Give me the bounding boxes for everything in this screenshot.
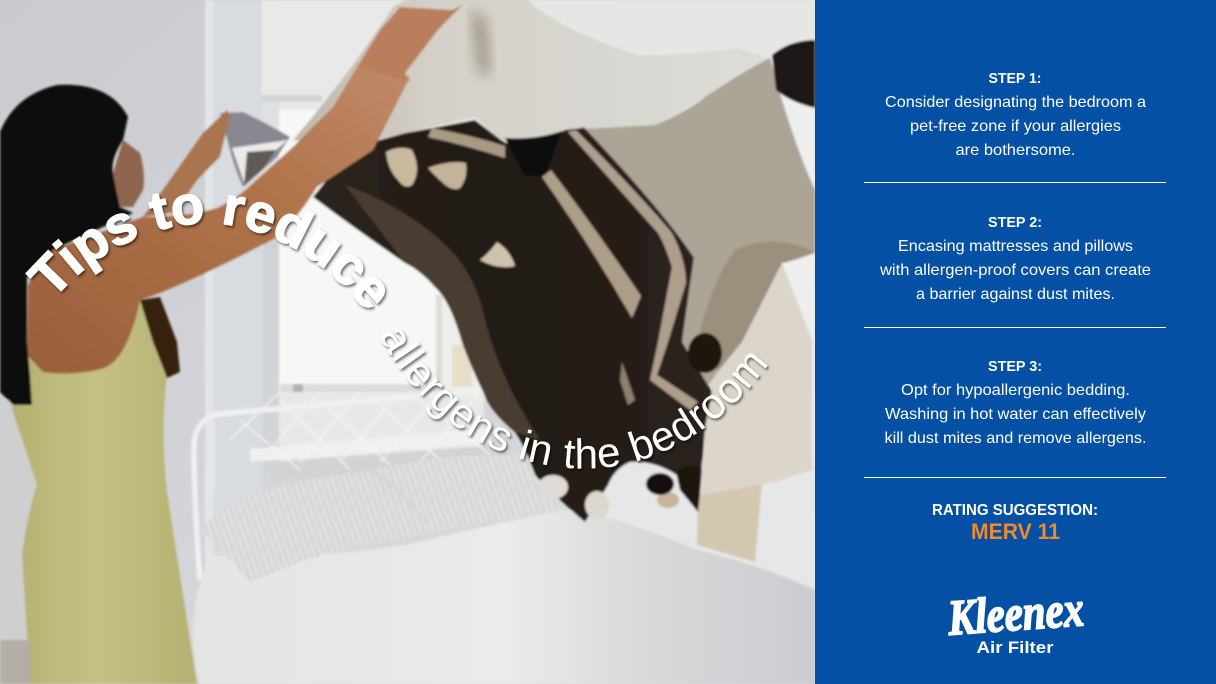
sill and lattice area xyxy=(230,392,500,480)
woman: far arm xyxy=(143,110,230,217)
blanket: lower right cream panel xyxy=(702,263,812,495)
step 1: pet-free zone if your allergies xyxy=(910,118,1121,135)
title line 2: allergens in the bedroom xyxy=(381,329,770,470)
step 2: Encasing mattresses and pillows xyxy=(898,238,1133,255)
second person legs xyxy=(697,482,762,562)
rating suggestion: MERV 11 xyxy=(971,519,1060,544)
step 3: Opt for hypoallergenic bedding. xyxy=(901,382,1130,399)
rating suggestion xyxy=(932,502,1098,544)
brand logo: Air Filter xyxy=(976,639,1054,657)
woman: face xyxy=(113,140,144,207)
headboard rail xyxy=(194,390,490,580)
step 3 xyxy=(884,358,1146,447)
title line 1: Tips to reduce xyxy=(25,193,388,312)
step 1: Consider designating the bedroom a xyxy=(885,94,1146,111)
step 2: STEP 2: xyxy=(988,214,1042,231)
blanket: grey corner xyxy=(220,112,290,187)
step 1: are bothersome. xyxy=(956,142,1076,159)
photo: woman making a bed xyxy=(0,0,815,684)
blanket: dark panel xyxy=(313,120,712,522)
woman: hair lock xyxy=(140,297,180,378)
step 3: STEP 3: xyxy=(988,358,1042,375)
windowsill items xyxy=(282,345,472,430)
brand logo xyxy=(945,580,1086,657)
panel: steps xyxy=(815,0,1216,684)
blanket: stripes xyxy=(428,128,698,410)
step 2 xyxy=(879,214,1151,303)
step 1: STEP 1: xyxy=(988,70,1042,87)
blanket: shadow under fold xyxy=(505,131,562,176)
rating suggestion: RATING SUGGESTION: xyxy=(932,502,1098,519)
wall details and window xyxy=(0,0,815,684)
tassels xyxy=(386,40,815,519)
step 2: with allergen-proof covers can create xyxy=(879,262,1151,279)
blanket: cream upper fold xyxy=(293,0,770,148)
step 3: kill dust mites and remove allergens. xyxy=(884,430,1146,447)
step 2: a barrier against dust mites. xyxy=(916,286,1115,303)
woman: raised hand xyxy=(357,5,462,82)
step 3: Washing in hot water can effectively xyxy=(885,406,1146,423)
step 1 xyxy=(885,70,1146,159)
woman: hair xyxy=(0,85,133,405)
blanket: taupe panel xyxy=(565,58,815,395)
brand logo: Kleenex xyxy=(945,580,1086,646)
bed xyxy=(193,510,815,684)
pillow: right xyxy=(372,455,562,532)
pillow: left xyxy=(202,472,430,582)
woman: dress xyxy=(12,262,197,684)
woman: back and near arm xyxy=(27,67,410,374)
background: left details xyxy=(0,640,30,684)
